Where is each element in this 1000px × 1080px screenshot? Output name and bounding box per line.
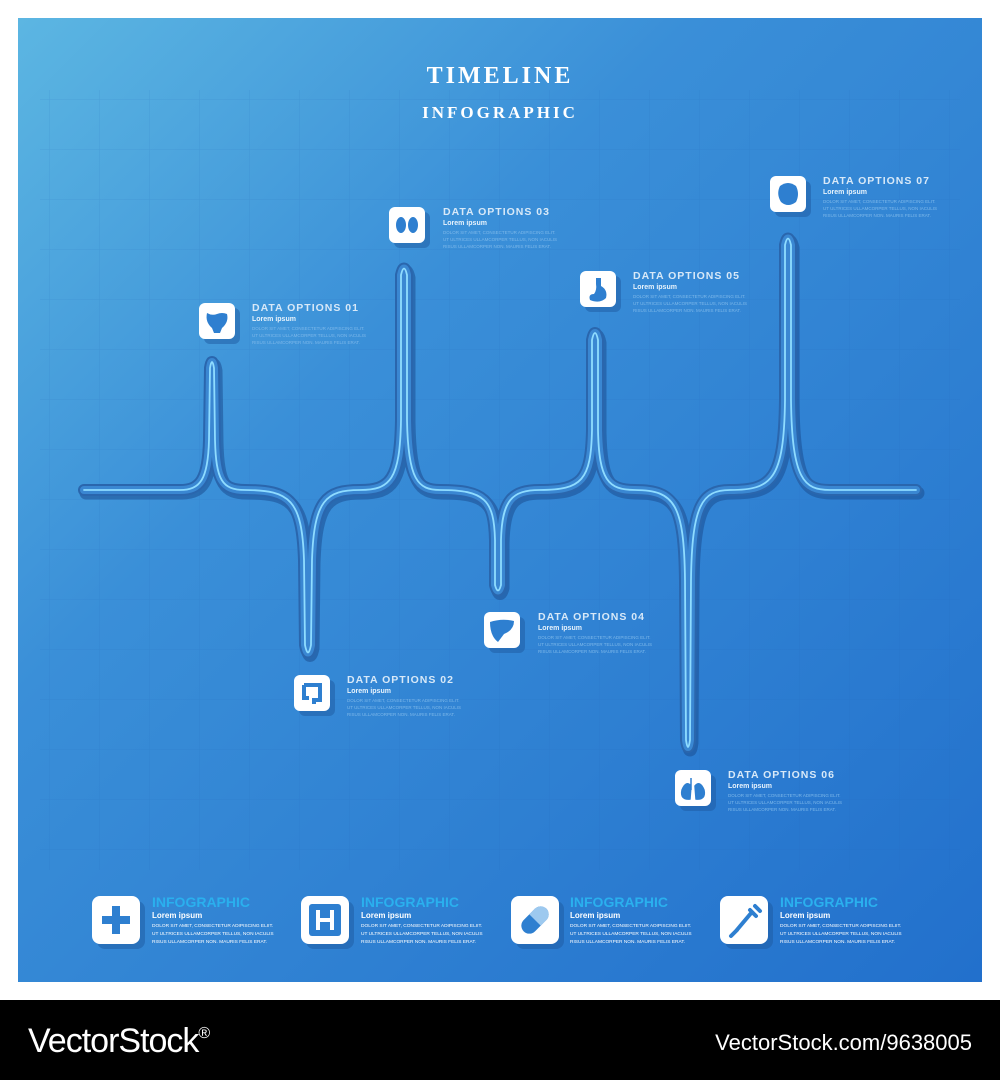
item 05: DATA OPTIONS 05 (633, 270, 740, 282)
item 04: RISUS ULLAMCORPER NON. MAURIS FELIS ERAT. (538, 649, 646, 654)
item 04: UT ULTRICES ULLAMCORPER TELLUS, NON IACULIS (538, 642, 652, 647)
title: INFOGRAPHIC (422, 103, 578, 122)
item 07: DOLOR SIT AMET, CONSECTETUR ADIPISCING ELIT. (823, 199, 935, 204)
bottom item: hospital: DOLOR SIT AMET, CONSECTETUR ADIPISCING ELIIT. (361, 923, 482, 929)
item 06: UT ULTRICES ULLAMCORPER TELLUS, NON IACULIS (728, 800, 842, 805)
item 02: DATA OPTIONS 02 (347, 674, 454, 686)
item 03: Lorem ipsum (443, 220, 487, 227)
footer watermark bar (0, 1000, 1000, 1080)
bottom item: pill: RISUS ULLAMCORPER NON. MAURIS FELIS ERAT. (570, 939, 685, 945)
bottom item: syringe: Lorem ipsum (780, 911, 830, 920)
item 03: DATA OPTIONS 03 (443, 206, 550, 218)
item 06 (675, 769, 842, 812)
bottom item: hospital: INFOGRAPHIC (361, 894, 459, 910)
bottom item: cross: DOLOR SIT AMET, CONSECTETUR ADIPISCING ELIIT. (152, 923, 273, 929)
item 02: RISUS ULLAMCORPER NON. MAURIS FELIS ERAT. (347, 712, 455, 717)
item 03: UT ULTRICES ULLAMCORPER TELLUS, NON IACULIS (443, 237, 557, 242)
bottom item: hospital: RISUS ULLAMCORPER NON. MAURIS FELIS ERAT. (361, 939, 476, 945)
bottom item: pill: INFOGRAPHIC (570, 894, 668, 910)
item 02: Lorem ipsum (347, 688, 391, 695)
bottom item: cross: UT ULTRICES ULLAMCORPER TELLUS, NON IACULIS (152, 931, 274, 937)
item 01 (199, 302, 366, 345)
bottom item: hospital: Lorem ipsum (361, 911, 411, 920)
item 02 (294, 674, 461, 717)
item 06: DATA OPTIONS 06 (728, 769, 835, 781)
item 04: DOLOR SIT AMET, CONSECTETUR ADIPISCING ELIT. (538, 635, 650, 640)
item 02: UT ULTRICES ULLAMCORPER TELLUS, NON IACULIS (347, 705, 461, 710)
item 07: RISUS ULLAMCORPER NON. MAURIS FELIS ERAT. (823, 213, 931, 218)
item 01: DATA OPTIONS 01 (252, 302, 359, 314)
item 03: DOLOR SIT AMET, CONSECTETUR ADIPISCING ELIT. (443, 230, 555, 235)
bottom item: syringe (720, 894, 902, 949)
item 04: Lorem ipsum (538, 625, 582, 632)
title: TIMELINE (427, 63, 573, 89)
footer watermark bar: VectorStock.com/9638005 (715, 1030, 972, 1055)
footer watermark bar: ® (198, 1025, 210, 1042)
item 07 (770, 175, 937, 218)
item 03 (389, 206, 557, 249)
bottom item: pill: UT ULTRICES ULLAMCORPER TELLUS, NON IACULIS (570, 931, 692, 937)
bottom item: hospital (301, 894, 483, 949)
bottom item: syringe: INFOGRAPHIC (780, 894, 878, 910)
bottom item: pill (511, 894, 692, 949)
item 05: Lorem ipsum (633, 284, 677, 291)
item 04: DATA OPTIONS 04 (538, 611, 645, 623)
item 05: DOLOR SIT AMET, CONSECTETUR ADIPISCING ELIT. (633, 294, 745, 299)
item 01: DOLOR SIT AMET, CONSECTETUR ADIPISCING ELIT. (252, 326, 364, 331)
bottom item: hospital: UT ULTRICES ULLAMCORPER TELLUS, NON IACULIS (361, 931, 483, 937)
title (422, 63, 578, 122)
item 07: UT ULTRICES ULLAMCORPER TELLUS, NON IACULIS (823, 206, 937, 211)
bottom item: cross: Lorem ipsum (152, 911, 202, 920)
item 04 (484, 611, 652, 654)
bottom item: syringe: UT ULTRICES ULLAMCORPER TELLUS, NON IACULIS (780, 931, 902, 937)
bottom item: cross: INFOGRAPHIC (152, 894, 250, 910)
timeline line (84, 238, 918, 750)
bottom item: syringe: DOLOR SIT AMET, CONSECTETUR ADIPISCING ELIIT. (780, 923, 901, 929)
item 01: RISUS ULLAMCORPER NON. MAURIS FELIS ERAT. (252, 340, 360, 345)
bottom item: cross: RISUS ULLAMCORPER NON. MAURIS FELIS ERAT. (152, 939, 267, 945)
bottom item: syringe: RISUS ULLAMCORPER NON. MAURIS FELIS ERAT. (780, 939, 895, 945)
footer watermark bar: VectorStock (28, 1022, 198, 1060)
item 07: Lorem ipsum (823, 189, 867, 196)
item 01: Lorem ipsum (252, 316, 296, 323)
item 01: UT ULTRICES ULLAMCORPER TELLUS, NON IACULIS (252, 333, 366, 338)
item 03: RISUS ULLAMCORPER NON. MAURIS FELIS ERAT. (443, 244, 551, 249)
bottom item: pill: Lorem ipsum (570, 911, 620, 920)
item 05 (580, 270, 747, 313)
bottom item: cross (92, 894, 274, 949)
item 06: Lorem ipsum (728, 783, 772, 790)
item 07: DATA OPTIONS 07 (823, 175, 930, 187)
item 05: RISUS ULLAMCORPER NON. MAURIS FELIS ERAT. (633, 308, 741, 313)
item 06: DOLOR SIT AMET, CONSECTETUR ADIPISCING ELIT. (728, 793, 840, 798)
bottom item: pill: DOLOR SIT AMET, CONSECTETUR ADIPISCING ELIIT. (570, 923, 691, 929)
item 05: UT ULTRICES ULLAMCORPER TELLUS, NON IACULIS (633, 301, 747, 306)
item 02: DOLOR SIT AMET, CONSECTETUR ADIPISCING ELIT. (347, 698, 459, 703)
item 06: RISUS ULLAMCORPER NON. MAURIS FELIS ERAT. (728, 807, 836, 812)
